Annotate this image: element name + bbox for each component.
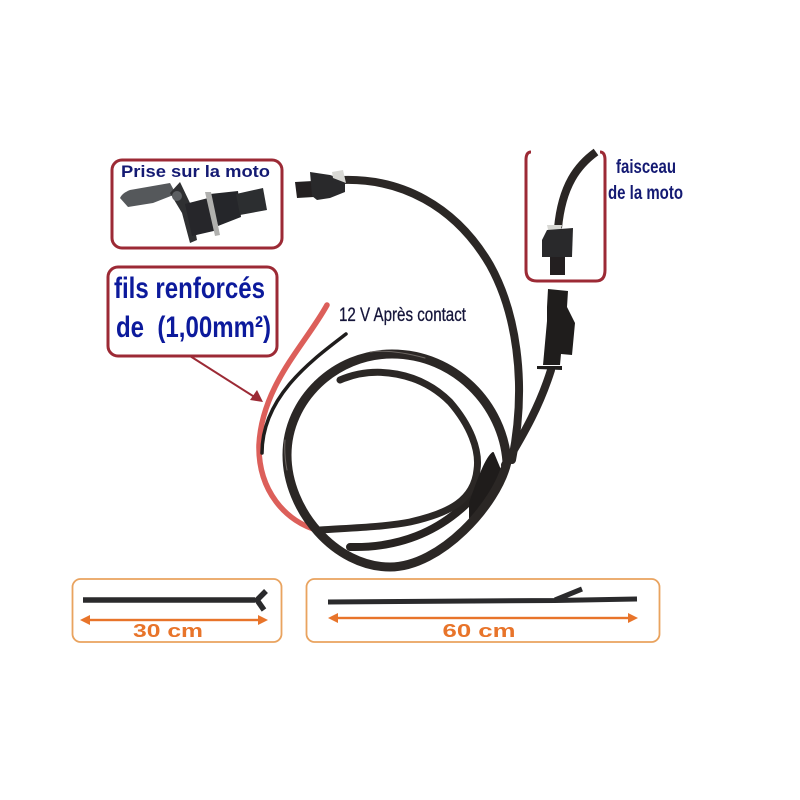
red wire — [259, 305, 327, 531]
label: 12 V après contact: 12 V Après contact — [339, 305, 467, 326]
junction — [470, 453, 503, 518]
arrow 60 cm — [328, 613, 638, 623]
icon: cable connector top — [295, 170, 346, 200]
cable harness — [259, 180, 551, 567]
label: faisceau de la moto: faisceau — [616, 157, 676, 178]
icon: motorcycle socket — [120, 182, 267, 243]
text: de (1,00mm²): de (1,00mm²) — [116, 311, 271, 344]
text: fils renforcés: fils renforcés — [114, 272, 265, 305]
heading: prise sur la moto: Prise sur la moto — [121, 162, 270, 181]
icon: inset connector — [542, 225, 573, 275]
black wire — [262, 334, 346, 453]
lower sleeve — [350, 492, 478, 547]
label: faisceau de la moto — [608, 157, 683, 204]
cable in inset — [558, 152, 596, 228]
panel: faisceau de la moto — [526, 152, 605, 281]
cable highlight — [285, 351, 425, 470]
panel: prise sur la moto — [112, 160, 282, 248]
cable 30 cm — [83, 591, 266, 610]
connector branch cable — [505, 370, 551, 465]
inner loop — [320, 372, 478, 530]
icon: male connector — [537, 289, 575, 370]
outer loop — [287, 354, 507, 567]
label 60 cm: 60 cm — [442, 621, 516, 641]
panel: fils renforcés — [108, 267, 277, 356]
cable 60 cm — [328, 589, 637, 602]
upper main cable — [342, 180, 519, 460]
label 30 cm: 30 cm — [133, 621, 203, 641]
panel: 60 cm — [306, 579, 660, 642]
arrow: to the reinforced wires — [190, 356, 263, 402]
label: faisceau de la moto: de la moto — [608, 183, 683, 204]
arrow 30 cm — [80, 615, 268, 625]
panel: 30 cm — [72, 579, 282, 642]
